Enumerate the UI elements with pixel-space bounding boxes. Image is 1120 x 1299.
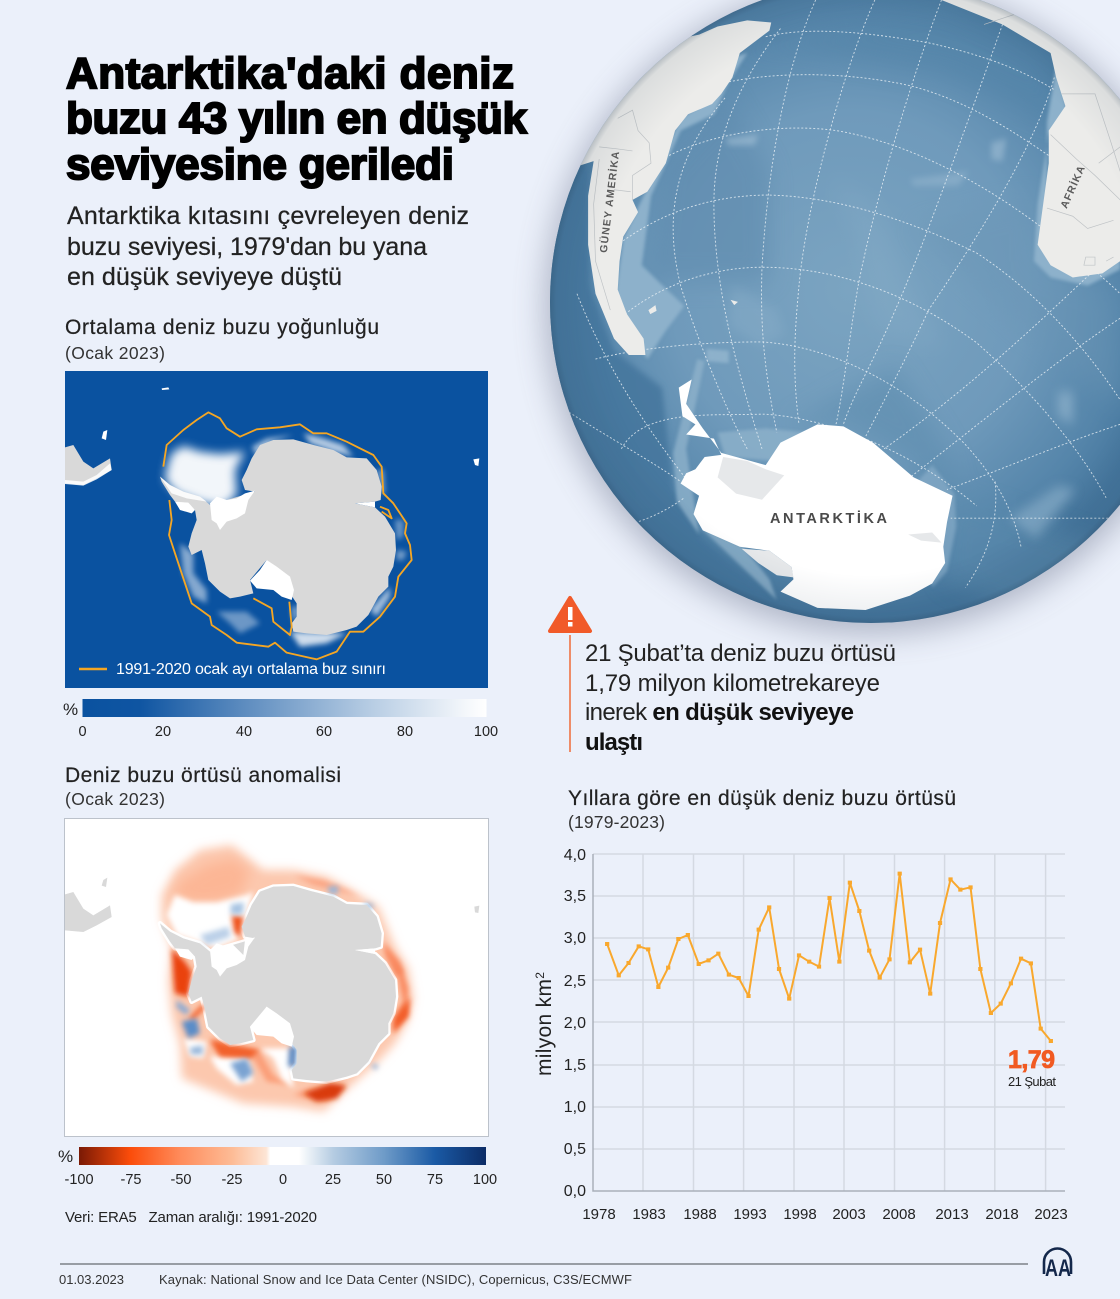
bathymetry: darker basins and lighter ridges: [550, 134, 1076, 612]
title: Antarktika'daki deniz: [66, 49, 514, 98]
colour scale: concentration: 100: [474, 724, 498, 740]
map: anomaly: [64, 818, 488, 1136]
period: (1979-2023): [568, 812, 665, 832]
land: Antarctica: [160, 886, 396, 1082]
y axis labels: 3,5: [564, 888, 586, 905]
legend: ice limit: 1991-2020 ocak ayı ortalama buz sınırı: [116, 661, 386, 678]
x axis labels: 1998: [783, 1206, 817, 1223]
y axis title: milyon km: [533, 979, 556, 1076]
colour scale: concentration: 40: [236, 724, 252, 740]
x axis labels: [582, 1206, 1068, 1223]
colour scale: concentration: 80: [397, 724, 413, 740]
period: (Ocak 2023): [65, 343, 165, 363]
colour scale: anomaly: %: [58, 1147, 73, 1166]
colour scale: anomaly: -75: [121, 1172, 141, 1188]
colour scale: concentration: 60: [316, 724, 332, 740]
continental shelves: [616, 53, 1120, 600]
colour scale: concentration: [63, 699, 498, 740]
callout text: 1,79 milyon kilometrekareye: [585, 670, 880, 697]
colour scale: concentration: 20: [155, 724, 171, 740]
x axis labels: 1993: [733, 1206, 767, 1223]
y axis labels: 2,5: [564, 973, 586, 990]
data note: Veri: ERA5 Zaman aralığı: 1991-2020: [65, 1209, 317, 1226]
map: concentration: [65, 371, 488, 688]
callout text: ulaştı: [585, 729, 643, 756]
land borders: [594, 12, 1120, 310]
callout text: 21 Şubat’ta deniz buzu örtüsü: [585, 640, 896, 667]
y axis labels: 0,5: [564, 1141, 586, 1158]
heading: Deniz buzu örtüsü anomalisi: [65, 764, 341, 787]
y axis labels: 1,0: [564, 1099, 586, 1116]
anomaly: strong losses: [172, 915, 410, 1102]
callout rule: [569, 635, 571, 752]
axes: [593, 854, 1065, 1191]
line chart: [533, 847, 1068, 1223]
x axis labels: 1988: [683, 1206, 717, 1223]
data line: [605, 872, 1053, 1043]
ice: Weddell Sea: [165, 446, 245, 507]
x axis labels: 2023: [1034, 1206, 1068, 1223]
anomaly: stronger bands: [173, 858, 408, 1102]
colour scale: anomaly: -50: [171, 1172, 191, 1188]
label: Afrika: AFRİKA: [1057, 163, 1088, 210]
globe shadow: [545, 0, 1120, 634]
x axis labels: 1978: [582, 1206, 616, 1223]
y axis title: 2: [533, 972, 547, 979]
title: buzu 43 yılın en düşük: [66, 94, 528, 143]
colour scale: anomaly: 0: [279, 1172, 287, 1188]
callout text: [585, 640, 896, 756]
y axis labels: [564, 847, 586, 1200]
label: Antarktika: ANTARKTİKA: [770, 510, 888, 527]
subtitle: en düşük seviyeye düştü: [67, 263, 342, 291]
colour scale: anomaly: -100: [64, 1172, 94, 1188]
source: Kaynak: National Snow and Ice Data Center (NSIDC), Copernicus, C3S/ECMWF: [159, 1272, 632, 1287]
x axis labels: 2003: [832, 1206, 866, 1223]
ice: coastal patches: [180, 433, 407, 647]
land: islands: [648, 300, 738, 314]
colour scale: anomaly: -25: [222, 1172, 242, 1188]
label: Güney Amerika: GÜNEY AMERİKA: [597, 150, 622, 253]
land: Africa and northern coast: [941, 0, 1120, 277]
panel: yearly minimum chart: [533, 787, 1068, 1223]
y axis labels: 2,0: [564, 1015, 586, 1032]
subtitle: [67, 202, 469, 291]
subtitle: buzu seviyesi, 1979'dan bu yana: [67, 233, 427, 261]
panel: mean sea ice concentration: [63, 316, 498, 740]
x axis labels: 1983: [632, 1206, 666, 1223]
ice limit contour: [163, 412, 412, 659]
y axis labels: 4,0: [564, 847, 586, 864]
colour scale: concentration: 0: [78, 724, 87, 740]
ice shelves: [175, 937, 375, 1047]
land: South America: [562, 20, 771, 355]
period: (Ocak 2023): [65, 789, 165, 809]
graticule: [562, 0, 1120, 588]
land: Antarctica: [160, 439, 396, 635]
anomaly: gains: [177, 886, 378, 1082]
y axis labels: 0,0: [564, 1183, 586, 1200]
x axis labels: 2018: [985, 1206, 1019, 1223]
callout: record low: [550, 598, 896, 756]
globe edge shading: [540, 0, 1120, 640]
colour scale: anomaly: 50: [376, 1172, 392, 1188]
value label: 1,79: [1008, 1046, 1055, 1074]
colour scale: anomaly: 75: [427, 1172, 443, 1188]
ice: South America and islands: [65, 387, 479, 486]
ice shelves: [160, 477, 375, 600]
footer rule: [60, 1263, 1028, 1265]
callout text: inerek en düşük seviyeye: [585, 699, 854, 726]
panel: sea ice cover anomaly: [58, 764, 497, 1226]
anomaly: white coastal halo: [160, 886, 396, 1082]
heading: Ortalama deniz buzu yoğunluğu: [65, 316, 379, 339]
grid lines: [593, 854, 1065, 1191]
heading: Yıllara göre en düşük deniz buzu örtüsü: [568, 787, 956, 810]
y axis labels: 1,5: [564, 1057, 586, 1074]
x axis labels: 2013: [935, 1206, 969, 1223]
globe map: [540, 0, 1120, 653]
y axis labels: 3,0: [564, 930, 586, 947]
logo: [1044, 1248, 1071, 1282]
ice shelves: [718, 457, 941, 577]
anomaly: white interior: [167, 892, 293, 1088]
logo: AA: [1045, 1255, 1071, 1282]
colour scale: anomaly: [58, 1147, 497, 1188]
title: [66, 49, 528, 189]
subtitle: Antarktika kıtasını çevreleyen deniz: [67, 202, 469, 230]
anomaly: outer light band: [162, 845, 413, 1112]
icon: warning triangle: [550, 598, 590, 631]
date label: 21 Şubat: [1008, 1074, 1056, 1089]
islands: [102, 878, 479, 913]
land: South America: [65, 892, 112, 932]
x axis labels: 2008: [882, 1206, 916, 1223]
date: 01.03.2023: [59, 1272, 124, 1287]
colour scale: anomaly: 25: [325, 1172, 341, 1188]
colour scale: anomaly: 100: [473, 1172, 497, 1188]
globe ocean and land: [540, 0, 1120, 653]
land: South America: [65, 445, 112, 485]
colour scale: concentration: %: [63, 700, 78, 719]
footer: [59, 1248, 1071, 1287]
land: Antarctica: [679, 379, 953, 610]
title: seviyesine geriledi: [66, 140, 454, 189]
